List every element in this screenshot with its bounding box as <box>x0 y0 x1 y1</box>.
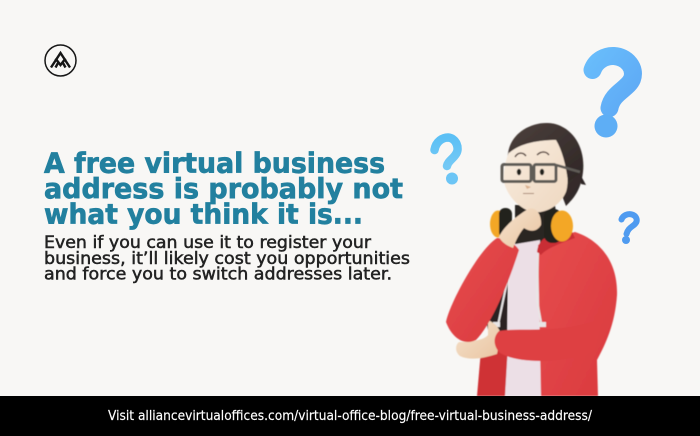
subheading text: Even if you can use it to register your <box>44 233 371 252</box>
face <box>504 139 568 212</box>
lower hand <box>456 320 501 359</box>
shirt <box>505 240 541 396</box>
heading: what you think it is... <box>44 198 363 230</box>
drawstrings <box>498 253 541 325</box>
subheading text: business, it’ll likely cost you opportunities <box>44 249 410 268</box>
jacket left panel <box>477 330 508 396</box>
character: thinking man <box>446 123 617 396</box>
heading: A free virtual business <box>44 148 385 180</box>
chin hand <box>499 208 541 248</box>
heading <box>44 148 403 230</box>
subheading text <box>44 233 410 284</box>
icon: left question mark <box>434 138 458 184</box>
eyes <box>517 169 521 175</box>
icon: right question mark <box>622 214 637 244</box>
forearm right <box>495 318 603 361</box>
logo <box>45 45 76 76</box>
icon: large question mark <box>592 56 633 138</box>
headphones left cup <box>490 210 506 238</box>
hair back <box>508 123 583 206</box>
ear <box>580 174 586 185</box>
heading: address is probably not <box>44 173 403 205</box>
nose and mouth <box>525 185 531 189</box>
upper arm left <box>446 238 519 342</box>
footer link text: Visit alliancevirtualoffices.com/virtual-office-blog/free-virtual-business-address/ <box>108 409 593 424</box>
neck and collar <box>515 205 560 250</box>
jacket right body <box>538 232 617 396</box>
eyebrows <box>515 152 549 157</box>
footer bar <box>0 396 700 436</box>
shadow under arm <box>487 270 508 345</box>
hair fringe <box>509 123 582 182</box>
headphones right cup <box>544 209 562 243</box>
glasses <box>502 164 580 182</box>
subheading text: and force you to switch addresses later. <box>44 264 392 284</box>
